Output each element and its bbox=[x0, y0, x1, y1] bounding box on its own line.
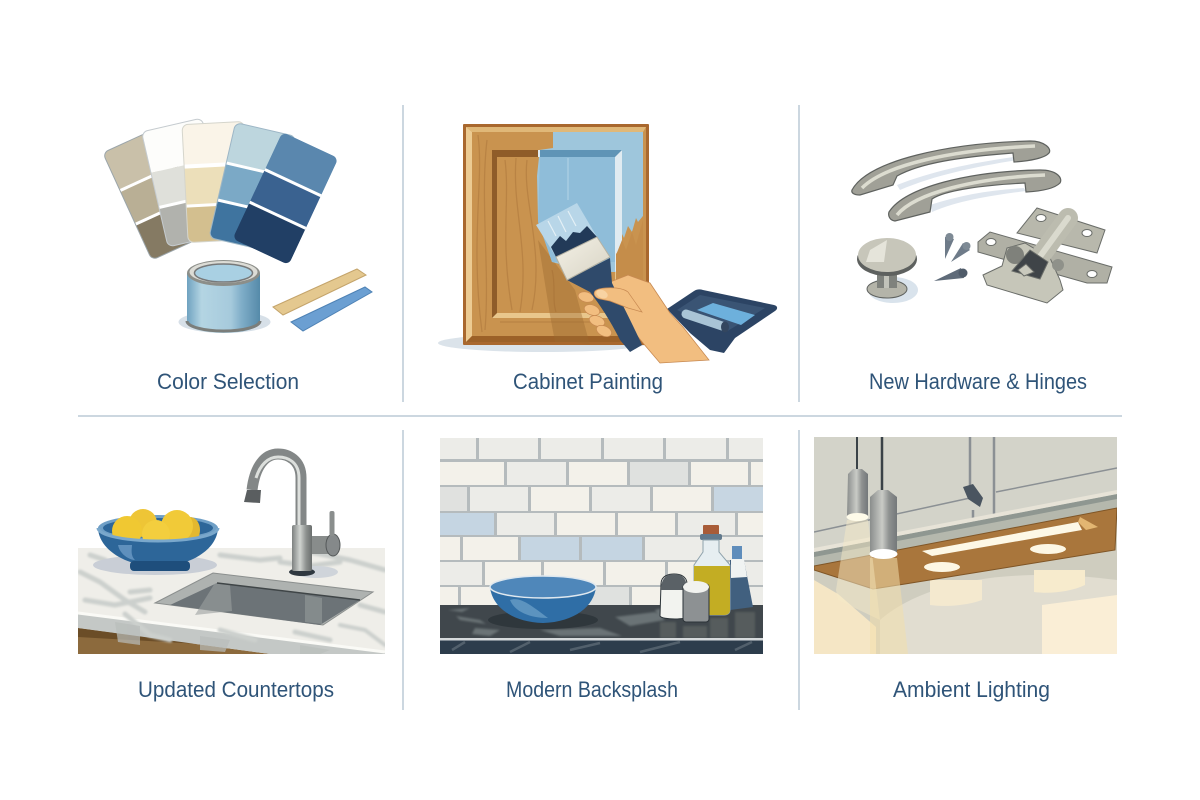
panel: ambient lighting bbox=[814, 437, 1117, 702]
icon: wood shelf underside bbox=[814, 508, 1117, 589]
fingers bbox=[577, 290, 613, 339]
icon: oil bottle bbox=[694, 525, 730, 615]
thumb bbox=[594, 288, 642, 312]
cabinet lines bbox=[814, 437, 1117, 532]
illustration: subway tile wall bbox=[440, 438, 763, 654]
wood grain bbox=[477, 135, 600, 332]
label: cabinet painting: Cabinet Painting bbox=[513, 369, 663, 394]
palm bbox=[605, 275, 709, 363]
icon: small bottle bbox=[730, 546, 753, 610]
icon: paint brush in hand bbox=[536, 203, 709, 363]
label: modern backsplash: Modern Backsplash bbox=[506, 677, 678, 702]
brush handle bbox=[567, 258, 642, 352]
ferrule bbox=[556, 237, 610, 280]
icon: paint tray with roller bbox=[667, 289, 777, 353]
panel: cabinet painting bbox=[438, 124, 777, 394]
illustration: marble counter bbox=[78, 454, 385, 654]
panel: modern backsplash bbox=[440, 438, 763, 702]
icon: cabinet door half painted bbox=[438, 124, 649, 352]
label: updated countertops: Updated Countertops bbox=[138, 677, 334, 702]
label: color selection: Color Selection bbox=[157, 369, 299, 394]
icon: cabinet hinge bbox=[978, 208, 1112, 303]
icon: door handle bbox=[963, 484, 983, 507]
icon: pendant lights bbox=[836, 437, 908, 654]
panel: new hardware and hinges bbox=[852, 141, 1112, 394]
icon: dark granite counter bbox=[440, 605, 763, 654]
grid dividers bbox=[78, 105, 1122, 710]
icon: screws bbox=[934, 233, 970, 281]
lower wall bbox=[814, 528, 1117, 622]
brush shadow on door bbox=[538, 240, 590, 345]
icon: undermount sink bbox=[155, 573, 373, 625]
icon: fruit bowl with lemons bbox=[93, 509, 218, 575]
icon: paint can bbox=[178, 260, 270, 333]
panel: color selection bbox=[103, 118, 372, 394]
painted area bbox=[537, 132, 643, 272]
icon: paint swatch fan bbox=[103, 118, 339, 265]
icon: faucet bbox=[244, 454, 340, 578]
label: ambient lighting: Ambient Lighting bbox=[893, 677, 1050, 702]
icon: salt and pepper shakers bbox=[660, 574, 709, 622]
icon: wood stir sticks bbox=[273, 269, 372, 331]
icon: blue bowl bbox=[488, 576, 598, 629]
icon: cabinet knob bbox=[857, 238, 918, 303]
bristles bbox=[536, 203, 597, 257]
infographic canvas bbox=[78, 105, 1122, 710]
illustration: lit kitchen scene bbox=[814, 437, 1117, 654]
label: hardware and hinges: New Hardware & Hinges bbox=[869, 369, 1087, 394]
panel: updated countertops bbox=[78, 454, 385, 702]
icon: bar handles bbox=[852, 141, 1061, 221]
